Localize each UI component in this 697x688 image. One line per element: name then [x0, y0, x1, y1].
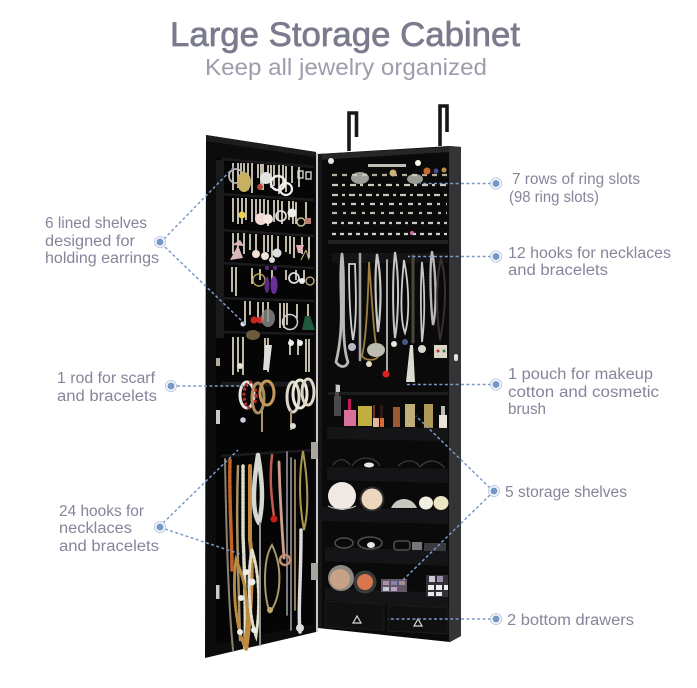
callout: pouch: 1 pouch for makeup — [508, 366, 653, 383]
open door — [205, 135, 322, 658]
shelf 2 items — [333, 458, 445, 468]
callout: pouch — [406, 366, 659, 418]
callout: 24 hooks: and bracelets — [59, 538, 159, 555]
callout: pouch: brush — [508, 401, 546, 418]
latch — [454, 354, 458, 361]
title: Large Storage Cabinet — [170, 16, 521, 54]
callout: 6 lined shelves — [45, 166, 245, 324]
callout: 1 rod — [57, 370, 248, 405]
door necklaces on 24 hooks — [225, 451, 307, 650]
cabinet — [205, 106, 461, 658]
callout: 24 hooks: necklaces — [59, 520, 132, 537]
hinges and latch on door — [216, 358, 322, 599]
callout: pouch: cotton and cosmetic — [508, 384, 659, 401]
callout: 24 hooks: 24 hooks for — [59, 503, 144, 520]
callout: ring slots: 7 rows of ring slots — [512, 171, 640, 188]
ring slots, seven rows — [332, 168, 447, 235]
callout: 1 rod: and bracelets — [57, 388, 157, 405]
two bottom drawers — [325, 601, 448, 634]
earring pendants — [229, 169, 315, 370]
callout: 12 hooks — [408, 245, 671, 279]
shelf 4 items: sunglasses — [335, 537, 446, 551]
earrings on lined shelves — [232, 163, 309, 375]
over-door hangers — [349, 106, 447, 151]
shelf 5 items: compacts and palettes — [328, 565, 448, 597]
callout: ring slots: (98 ring slots) — [509, 189, 599, 206]
callout: 24 hooks — [59, 450, 243, 555]
callout: 6 lined shelves: 6 lined shelves — [45, 215, 147, 232]
rod with bracelets — [220, 379, 314, 432]
callout: 6 lined shelves: designed for — [45, 233, 135, 250]
callout: storage shelves: 5 storage shelves — [505, 484, 627, 501]
cabinet body — [318, 146, 461, 642]
shelf 1: pouch and cosmetics — [334, 384, 447, 428]
callout: storage shelves — [403, 416, 627, 580]
callout: 6 lined shelves: holding earrings — [45, 250, 159, 267]
callout: 12 hooks: and bracelets — [508, 262, 608, 279]
callout: 1 rod: 1 rod for scarf — [57, 370, 156, 387]
right-side necklaces on 12 hooks — [336, 252, 447, 382]
callout: 12 hooks: 12 hooks for necklaces — [508, 245, 671, 262]
subtitle: Keep all jewelry organized — [205, 54, 487, 80]
shelf 3 items: powders — [328, 482, 448, 512]
callout: ring slots — [420, 171, 640, 206]
callout: drawers: 2 bottom drawers — [507, 612, 634, 629]
callout: drawers — [388, 612, 634, 629]
storage shelves — [322, 427, 448, 608]
